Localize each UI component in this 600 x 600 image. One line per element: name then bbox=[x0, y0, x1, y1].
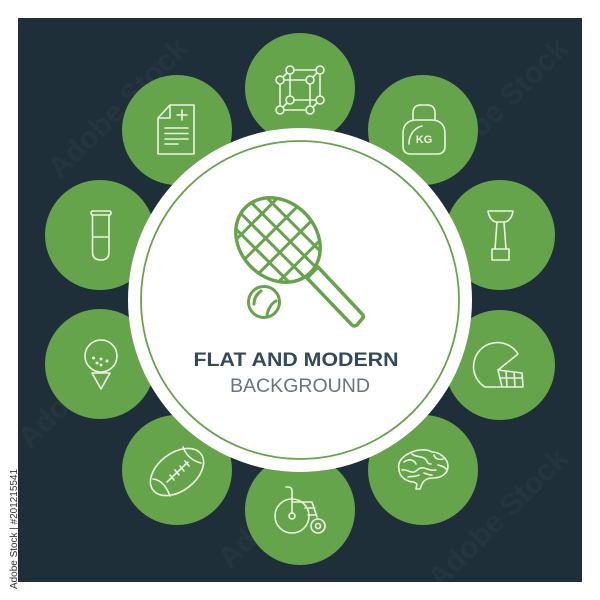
watermark text: Adobe Stock bbox=[12, 302, 165, 455]
watermark text: Adobe Stock bbox=[422, 32, 575, 185]
racket bbox=[234, 196, 366, 328]
panel: football bbox=[122, 415, 232, 525]
panel: weight bbox=[368, 75, 478, 185]
panel: brain bbox=[368, 415, 478, 525]
panel: central circle bbox=[128, 128, 472, 472]
icon: wireframe cube bbox=[276, 66, 324, 114]
subheading: BACKGROUND bbox=[230, 376, 370, 397]
icon: wheelchair bbox=[275, 487, 325, 533]
side credit text: Adobe Stock | #201215541 bbox=[8, 469, 20, 589]
panel: test tube bbox=[45, 180, 155, 290]
icon: football helmet bbox=[474, 343, 523, 387]
watermark text: Adobe Stock bbox=[212, 422, 365, 575]
icon: test tube bbox=[91, 211, 111, 260]
panel: helmet bbox=[445, 310, 555, 420]
panel: golf bbox=[45, 309, 155, 419]
watermark text: Adobe Stock bbox=[422, 442, 575, 595]
icon: trophy bbox=[488, 211, 513, 260]
heading: FLAT AND MODERN bbox=[194, 349, 398, 371]
ball bbox=[248, 286, 280, 318]
icon: golf ball on tee bbox=[85, 340, 117, 389]
panel: cube bbox=[245, 33, 355, 143]
icon: american football bbox=[142, 439, 212, 505]
icon: tennis racket and ball bbox=[234, 196, 366, 328]
label: KG: KG bbox=[416, 134, 432, 146]
icon: brain bbox=[399, 450, 448, 489]
icon: medical document bbox=[158, 105, 194, 154]
watermark text: Adobe Stock bbox=[42, 32, 195, 185]
panel: trophy bbox=[445, 180, 555, 290]
panel: document bbox=[122, 75, 232, 185]
panel: wheelchair bbox=[245, 455, 355, 565]
